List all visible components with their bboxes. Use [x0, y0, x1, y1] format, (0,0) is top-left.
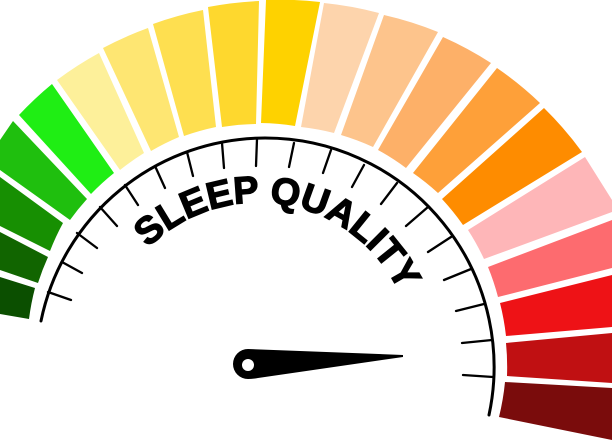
segment: orange: [413, 68, 540, 193]
curved title: SLEEP QUALITY: SLEEP QUALITY: [134, 176, 423, 284]
segment: pale yellow: [57, 53, 144, 170]
segment: deep orange: [442, 108, 582, 225]
segment: dark green: [0, 232, 48, 283]
tick marks: [48, 139, 493, 377]
segment: peach: [341, 15, 438, 147]
segment: light orange: [378, 37, 491, 168]
segment: deeper yellow: [208, 1, 259, 127]
segment: pale peach: [301, 3, 379, 133]
segment: green: [0, 121, 87, 220]
segment: bright red: [500, 275, 612, 336]
segment: salmon red: [488, 220, 612, 297]
needle pointer: [233, 349, 403, 379]
segment: darkest green: [0, 277, 35, 319]
scale arc: [41, 138, 494, 415]
segment: yellow: [153, 10, 216, 136]
segment: crimson: [506, 333, 612, 383]
segment: pink: [468, 157, 612, 259]
segment: golden yellow: [261, 0, 320, 126]
segment: dark maroon: [499, 382, 612, 440]
segment: bright green: [19, 84, 114, 194]
segment: light yellow: [103, 28, 179, 151]
scale arc with tick marks: [41, 138, 494, 415]
segment: medium green: [0, 177, 63, 251]
